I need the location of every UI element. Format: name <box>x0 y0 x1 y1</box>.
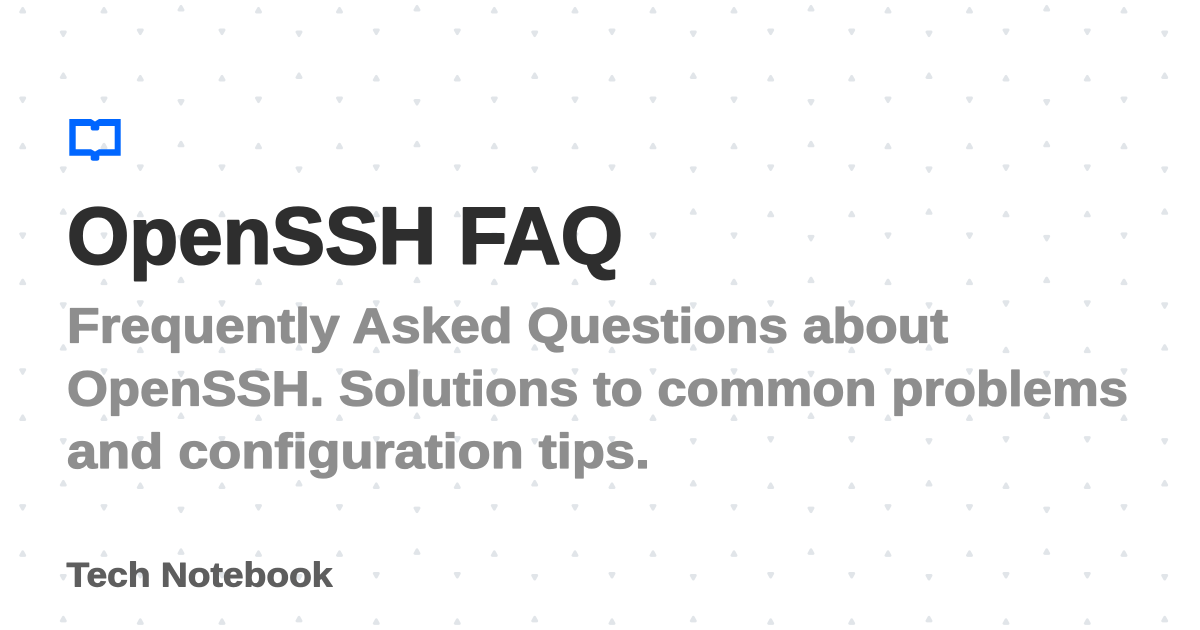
author: Tech Notebook: Tech Notebook <box>66 556 333 594</box>
subtitle: Frequently Asked Questions about <box>67 299 948 353</box>
subtitle: OpenSSH. Solutions to common problems <box>67 362 1128 416</box>
icon: open book <box>69 119 121 161</box>
subtitle: and configuration tips. <box>67 425 650 479</box>
title: OpenSSH FAQ <box>67 192 623 282</box>
subtitle <box>67 299 1128 479</box>
